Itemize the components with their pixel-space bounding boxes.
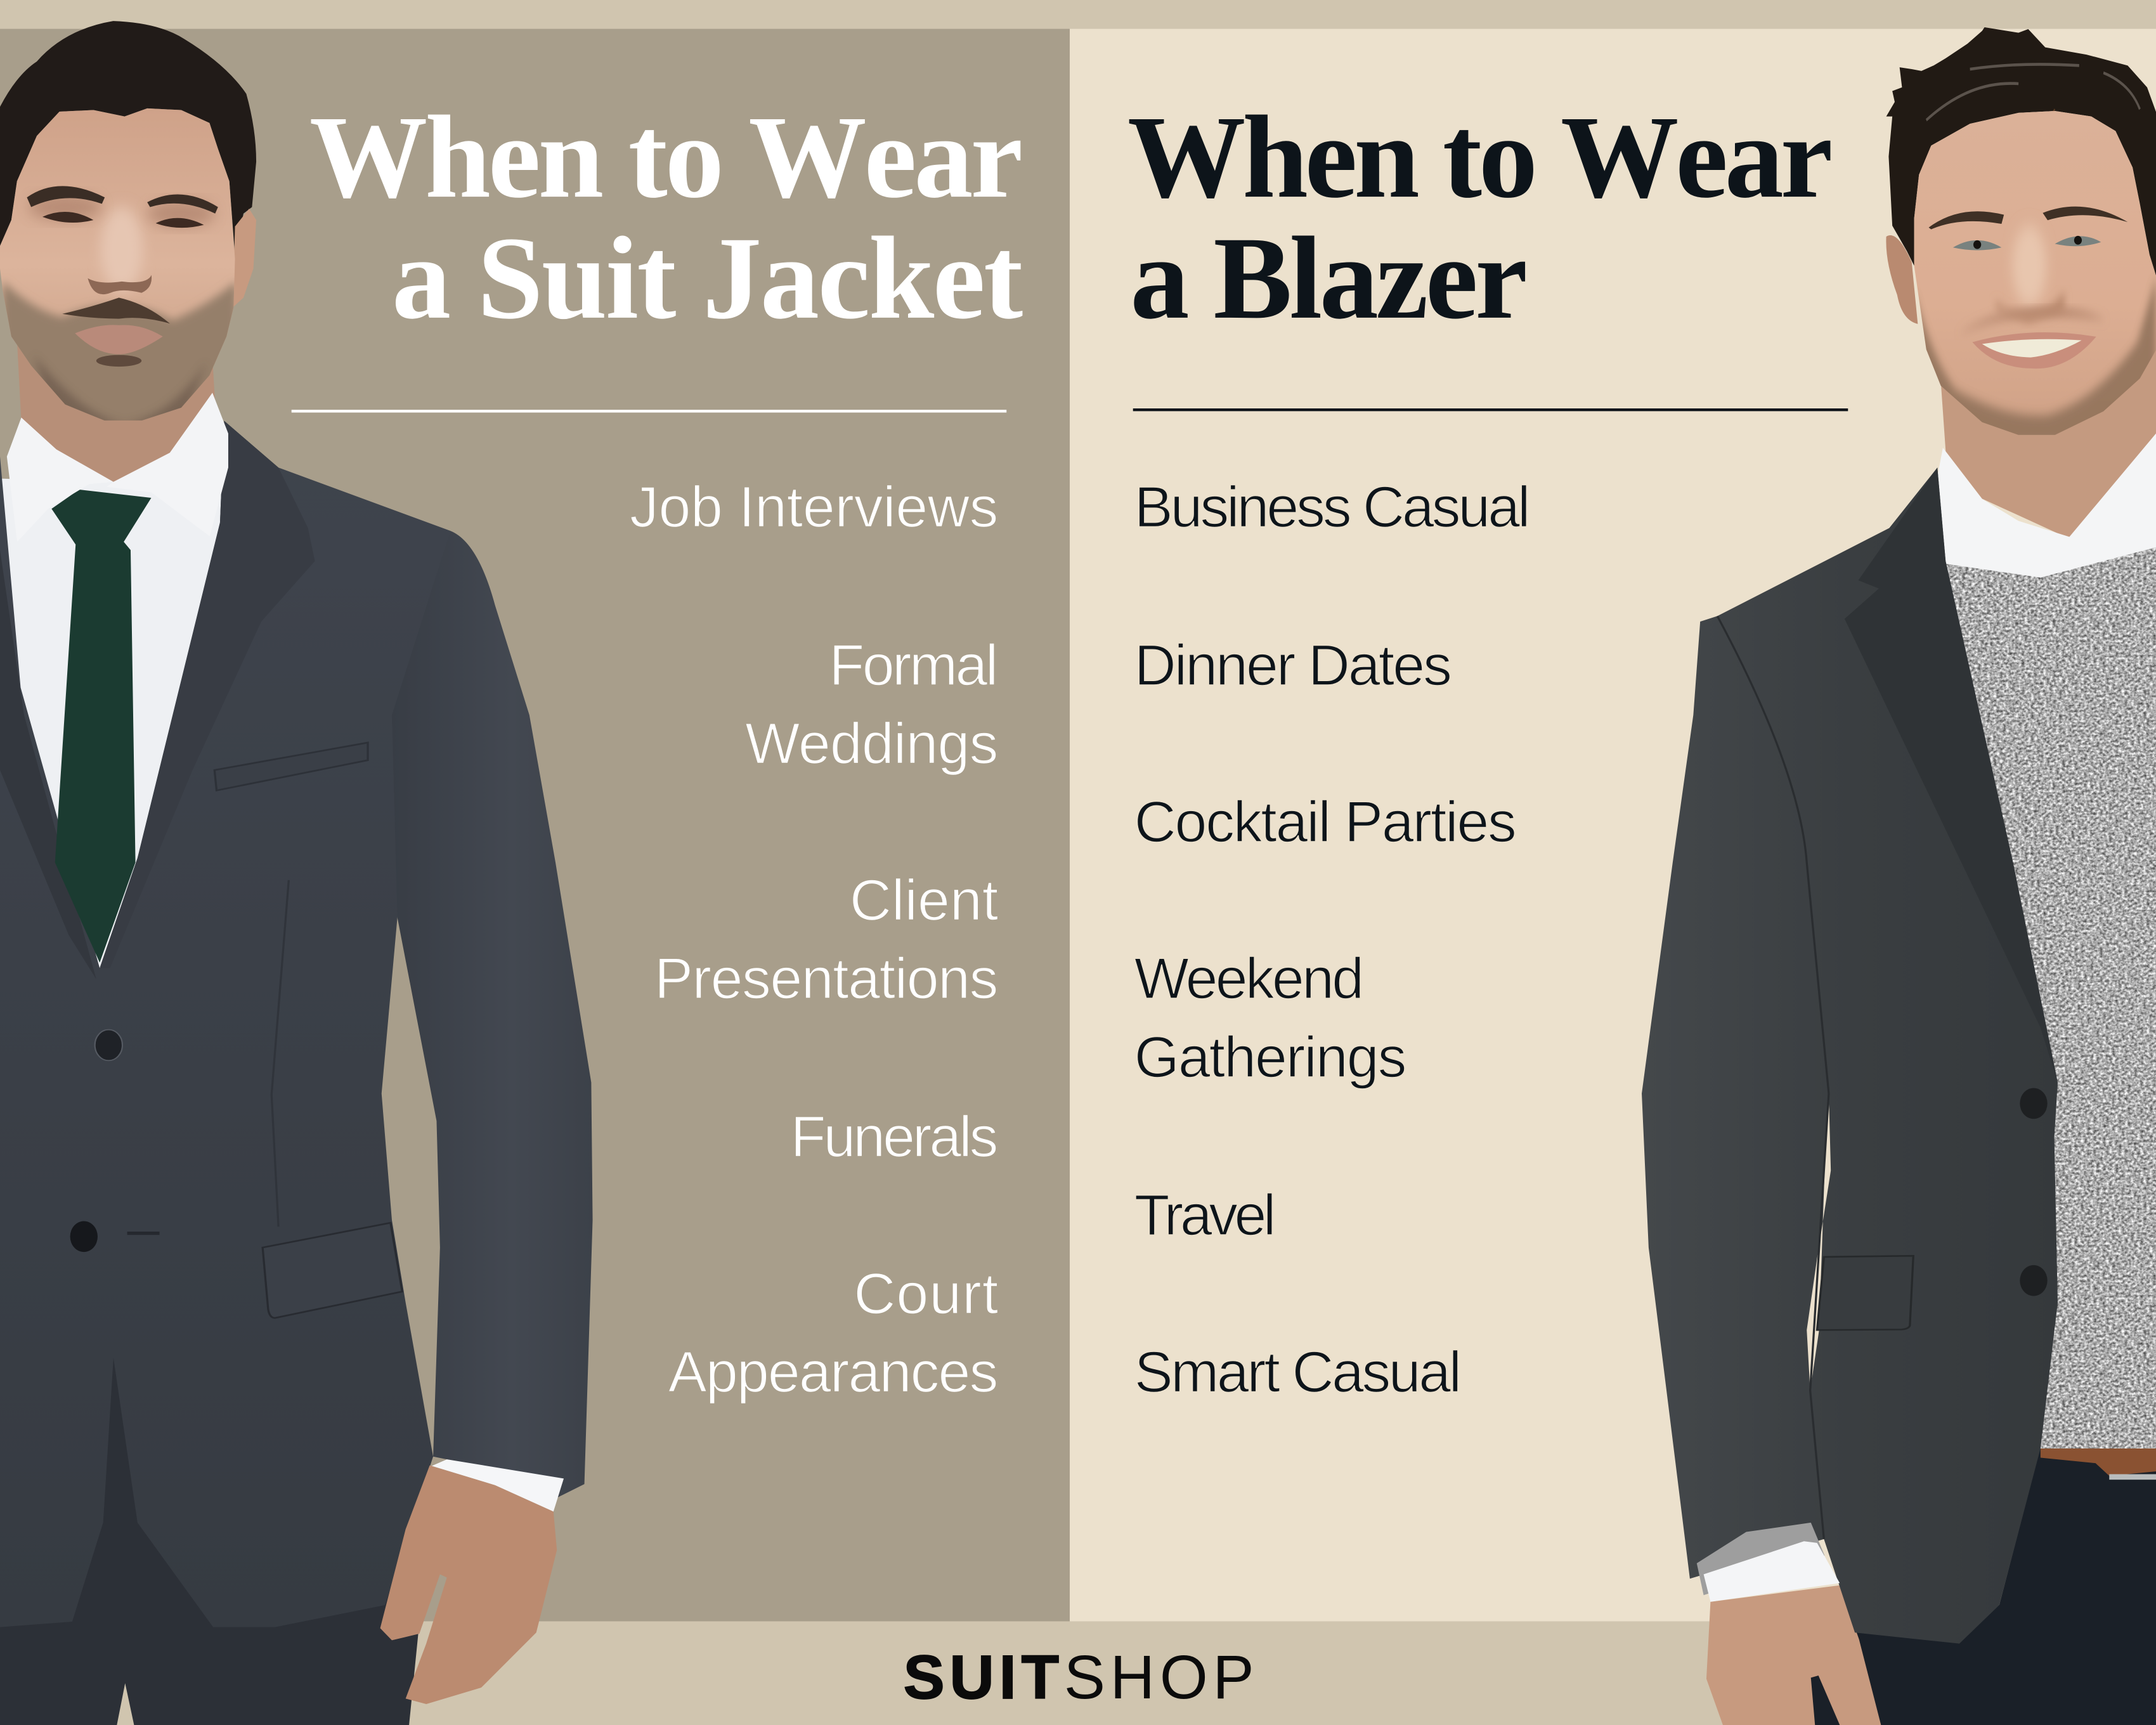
ear bbox=[233, 209, 256, 308]
hair bbox=[0, 21, 256, 256]
heading: blazer: a Blazer bbox=[1130, 213, 1528, 344]
hand bbox=[380, 1466, 557, 1704]
flap pocket bbox=[263, 1223, 402, 1318]
face bbox=[0, 108, 235, 420]
sweater bbox=[1945, 545, 2156, 1448]
illustration: man in suit jacket bbox=[0, 393, 593, 1725]
list: suit jacket occasions bbox=[630, 475, 998, 1404]
illustration: head of man in blazer bbox=[1886, 27, 2156, 538]
smile bbox=[1972, 332, 2096, 368]
face shading bbox=[1914, 226, 2156, 444]
heading: suit jacket: When to Wear bbox=[309, 92, 1023, 223]
list: blazer occasions bbox=[1134, 475, 1530, 1404]
heading: suit jacket bbox=[309, 92, 1023, 344]
belt buckle bbox=[2109, 1474, 2156, 1480]
illustration: man in blazer bbox=[1642, 433, 2156, 1725]
list: suit jacket occasions: Weddings bbox=[745, 712, 998, 776]
list: suit jacket occasions: Court bbox=[854, 1262, 998, 1326]
ear bbox=[1886, 235, 1918, 324]
moustache bbox=[62, 297, 170, 323]
shirt cuff bbox=[1704, 1541, 1840, 1602]
bottom band bbox=[0, 1622, 2156, 1725]
list: suit jacket occasions: Client bbox=[850, 869, 998, 933]
button 2 bbox=[70, 1221, 98, 1252]
shirt collar bbox=[1936, 433, 2156, 578]
lapel bbox=[100, 421, 315, 968]
neck bbox=[17, 340, 215, 485]
tie bbox=[51, 490, 152, 963]
brows and eyes bbox=[27, 186, 218, 228]
list: suit jacket occasions: Job Interviews bbox=[630, 475, 998, 539]
jacket body bbox=[0, 421, 450, 1627]
seam bbox=[271, 880, 289, 1227]
flap pocket bbox=[1817, 1256, 1913, 1330]
logo: SuitShop: SUITSHOP bbox=[904, 1643, 1254, 1712]
trousers bbox=[1810, 1447, 2156, 1725]
list: blazer occasions: Gatherings bbox=[1134, 1025, 1406, 1090]
nose shadow bbox=[1996, 291, 2065, 322]
list: suit jacket occasions: Presentations bbox=[654, 947, 998, 1011]
list: suit jacket occasions: Formal bbox=[829, 634, 998, 698]
lapel bbox=[1845, 467, 2058, 1083]
panel: suit jacket bbox=[0, 29, 1070, 1622]
panel: blazer bbox=[1070, 29, 2156, 1622]
collar bbox=[7, 393, 228, 542]
breast pocket bbox=[214, 743, 368, 790]
list: blazer occasions: Business Casual bbox=[1134, 475, 1530, 539]
top band bbox=[0, 0, 2156, 30]
hair bbox=[1886, 27, 2156, 277]
stray hair bbox=[2015, 109, 2055, 164]
list: blazer occasions: Dinner Dates bbox=[1134, 634, 1452, 698]
button 1 bbox=[2020, 1088, 2048, 1119]
shirt bbox=[0, 434, 228, 1072]
button 2 bbox=[2020, 1265, 2048, 1296]
illustration: head of man in suit jacket bbox=[0, 21, 256, 485]
nostril shadow bbox=[88, 275, 152, 294]
hand bbox=[1706, 1585, 1881, 1725]
button 1 bbox=[95, 1030, 122, 1060]
list: blazer occasions: Cocktail Parties bbox=[1134, 790, 1517, 854]
jacket sleeve bbox=[392, 531, 593, 1498]
sweater cuff bbox=[1697, 1523, 1824, 1595]
hair strands bbox=[1926, 64, 2140, 120]
list: blazer occasions: Travel bbox=[1134, 1183, 1276, 1247]
neck bbox=[1941, 328, 2156, 538]
face bbox=[1914, 111, 2156, 435]
heading: blazer: When to Wear bbox=[1127, 92, 1833, 223]
list: suit jacket occasions: Appearances bbox=[668, 1340, 998, 1404]
list: blazer occasions: Smart Casual bbox=[1134, 1340, 1462, 1404]
list: suit jacket occasions: Funerals bbox=[791, 1105, 998, 1169]
jacket bbox=[1642, 467, 2058, 1644]
face shading bbox=[0, 194, 238, 427]
lips bbox=[75, 325, 163, 355]
arm gap bbox=[1807, 1093, 1831, 1391]
trousers bbox=[0, 1320, 421, 1725]
cuff bbox=[432, 1459, 564, 1511]
chin shadow bbox=[96, 355, 141, 367]
sleeve seam bbox=[1717, 616, 1829, 1539]
list: blazer occasions: Weekend bbox=[1134, 947, 1364, 1011]
heading: suit jacket: a Suit Jacket bbox=[392, 213, 1023, 344]
brows and eyes bbox=[1929, 207, 2127, 251]
heading: blazer bbox=[1127, 92, 1833, 344]
belt bbox=[2041, 1447, 2156, 1476]
